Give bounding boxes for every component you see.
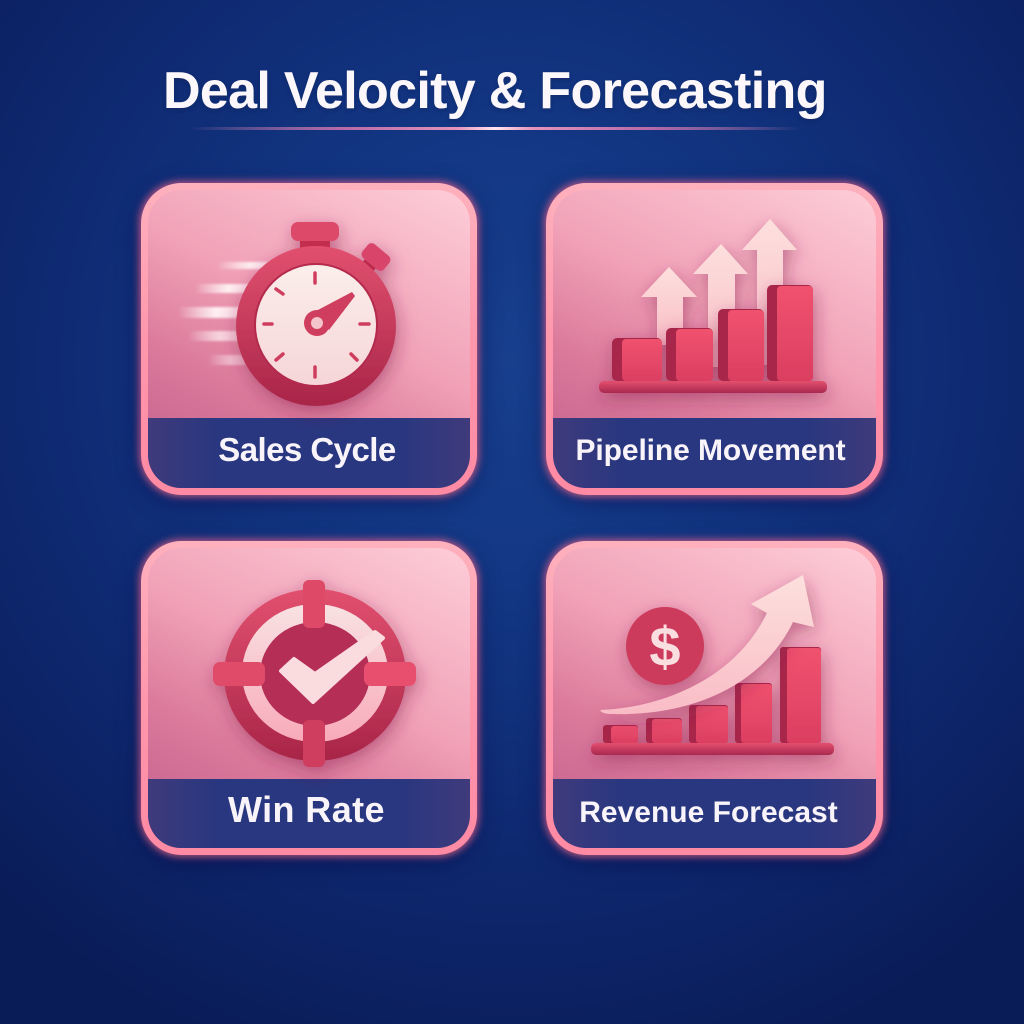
panel: win rate [144,544,474,859]
label band: sales cycle [148,418,470,488]
bars [591,647,834,755]
label band: revenue forecast [553,779,876,848]
label: sales cycle: Sales Cycle [218,431,396,468]
speed lines [178,262,272,365]
bars [599,285,827,393]
label band: pipeline movement [553,418,876,488]
title underline [190,127,800,130]
icon: stopwatch [178,222,396,406]
icon: rising bars and arrows [599,219,827,393]
icon: coin, bars and growth arrow [591,575,834,755]
panel: sales cycle [144,186,474,498]
icon: target with checkmark [213,580,416,767]
stopwatch body [236,222,396,406]
label band: win rate [148,779,470,848]
dollar coin [626,607,704,685]
dollar coin: $ [649,615,681,678]
label: win rate: Win Rate [228,789,385,830]
label: revenue forecast: Revenue Forecast [579,796,838,829]
label: pipeline movement: Pipeline Movement [575,434,846,467]
growth arrow [600,575,814,714]
arrows [641,219,797,367]
title: Deal Velocity & Forecasting [163,62,827,120]
panel: pipeline movement [549,186,880,498]
panel: revenue forecast [549,544,880,859]
checkmark [281,632,383,702]
